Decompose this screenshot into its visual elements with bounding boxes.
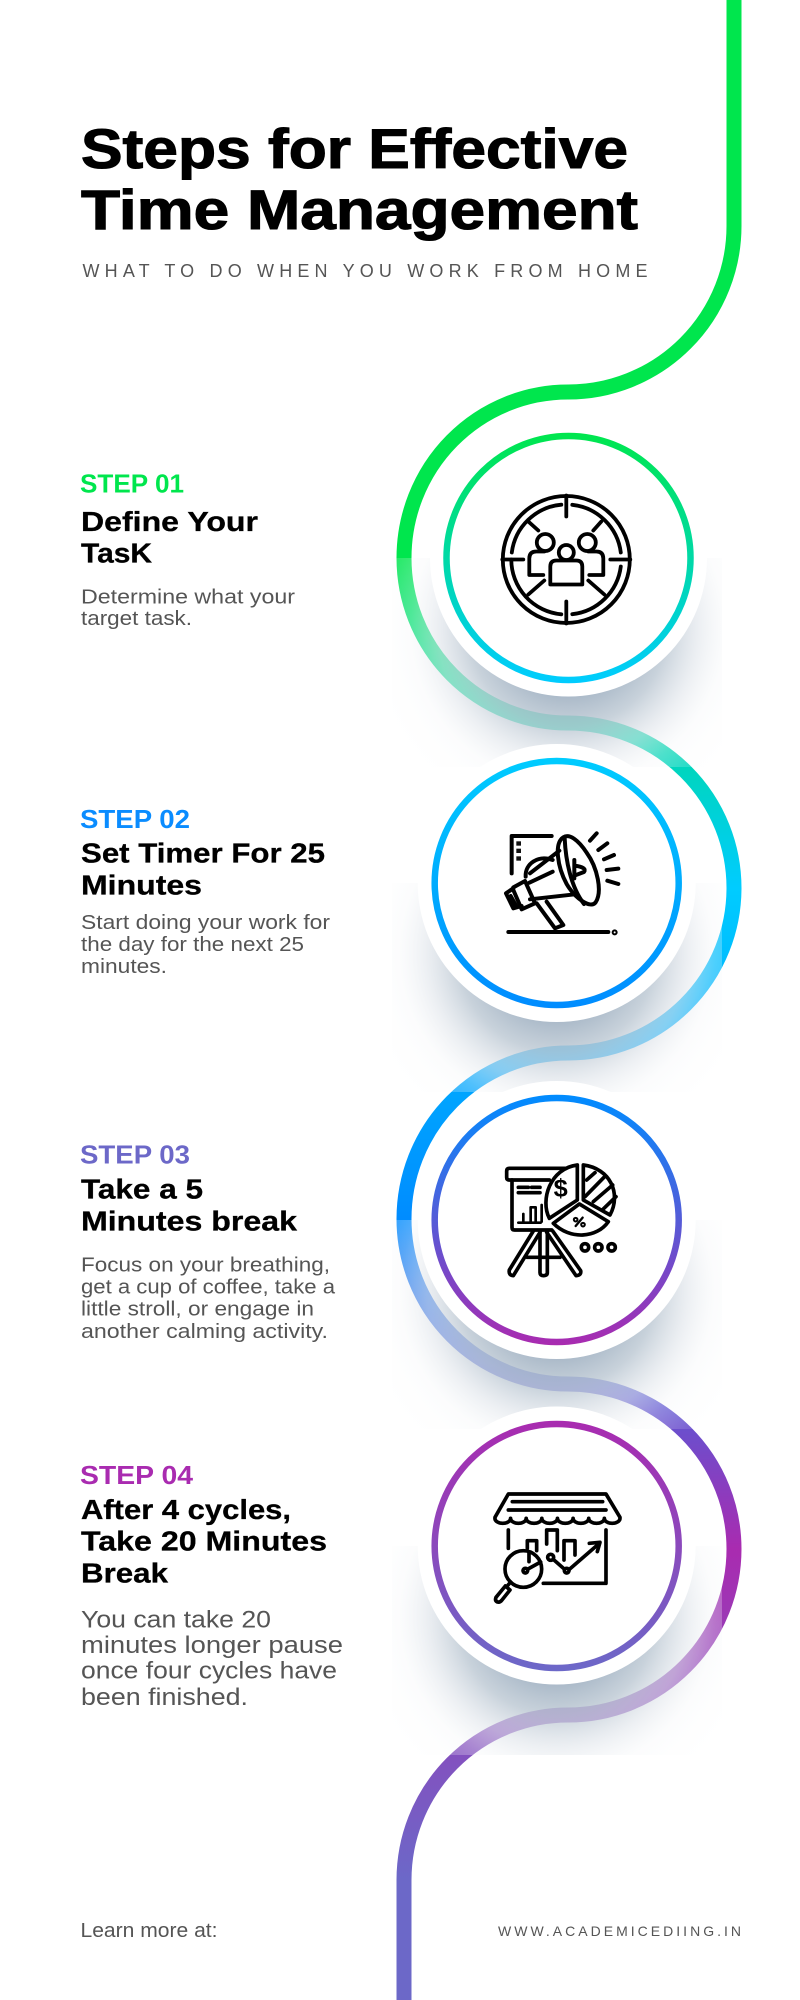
step 3 heading (81, 1174, 297, 1236)
footer: learn more: Learn more at: (80, 1920, 218, 1942)
footer: website: WWW.ACADEMICEDIING.IN (498, 1923, 741, 1939)
step 4 label: STEP 04 (80, 1460, 194, 1490)
step 4 description: once four cycles have (81, 1658, 337, 1684)
icon label: dollar sign: $ (554, 1175, 568, 1203)
step 1 description: Determine what your (81, 586, 295, 608)
step 1 heading: Define Your (81, 506, 258, 537)
step 3 description: get a cup of coffee, take a (81, 1276, 336, 1298)
step 3 description: little stroll, or engage in (81, 1298, 314, 1320)
step 2 heading: Minutes (81, 870, 202, 900)
step 3 label: STEP 03 (80, 1140, 190, 1170)
panel: step 2 text (80, 804, 330, 978)
step 3 description: Focus on your breathing, (81, 1254, 330, 1276)
step 4 description (81, 1606, 343, 1711)
panel: circle 4 (392, 1406, 722, 1755)
title: Time Management (81, 178, 638, 241)
icon: shop with analytics (495, 1494, 620, 1602)
panel: step 1 text (80, 468, 295, 630)
winding gradient path (404, 0, 734, 2000)
step 3 heading: Minutes break (81, 1206, 297, 1236)
step 1 label: STEP 01 (80, 468, 184, 498)
step 2 heading: Set Timer For 25 (81, 838, 325, 868)
subtitle: WHAT TO DO WHEN YOU WORK FROM HOME (82, 261, 648, 281)
panel: step 4 text (80, 1460, 343, 1711)
step 1 description (81, 586, 295, 630)
step 2 description (81, 912, 330, 978)
step 1 description: target task. (81, 608, 192, 630)
step 4 description: You can take 20 (81, 1606, 271, 1634)
icon: presentation board and pie chart (507, 1165, 616, 1276)
step 1 heading: TasK (81, 538, 152, 568)
step 4 description: minutes longer pause (81, 1632, 343, 1659)
step 2 description: Start doing your work for (81, 912, 330, 934)
step 2 description: the day for the next 25 (81, 934, 304, 956)
panel: step 3 text (80, 1140, 336, 1343)
step 1 heading (81, 506, 258, 568)
step 2 label: STEP 02 (80, 804, 190, 834)
panel: circle 3 (392, 1081, 722, 1429)
step 4 heading (81, 1494, 327, 1588)
icon: target with people (502, 496, 630, 624)
step 3 heading: Take a 5 (81, 1174, 203, 1204)
step 3 description (81, 1254, 336, 1343)
step 3 description: another calming activity. (81, 1321, 328, 1343)
step 4 description: been finished. (81, 1684, 248, 1711)
icon: megaphone (506, 833, 618, 933)
panel: circle 1 (392, 420, 722, 767)
step 2 heading (81, 838, 325, 900)
title: Steps for Effective (81, 117, 628, 180)
step 4 heading: After 4 cycles, (81, 1494, 291, 1525)
step 4 heading: Take 20 Minutes (81, 1526, 327, 1556)
step 2 description: minutes. (81, 956, 167, 978)
title (81, 117, 638, 241)
step 4 heading: Break (81, 1558, 168, 1588)
panel: circle 2 (392, 744, 722, 1092)
